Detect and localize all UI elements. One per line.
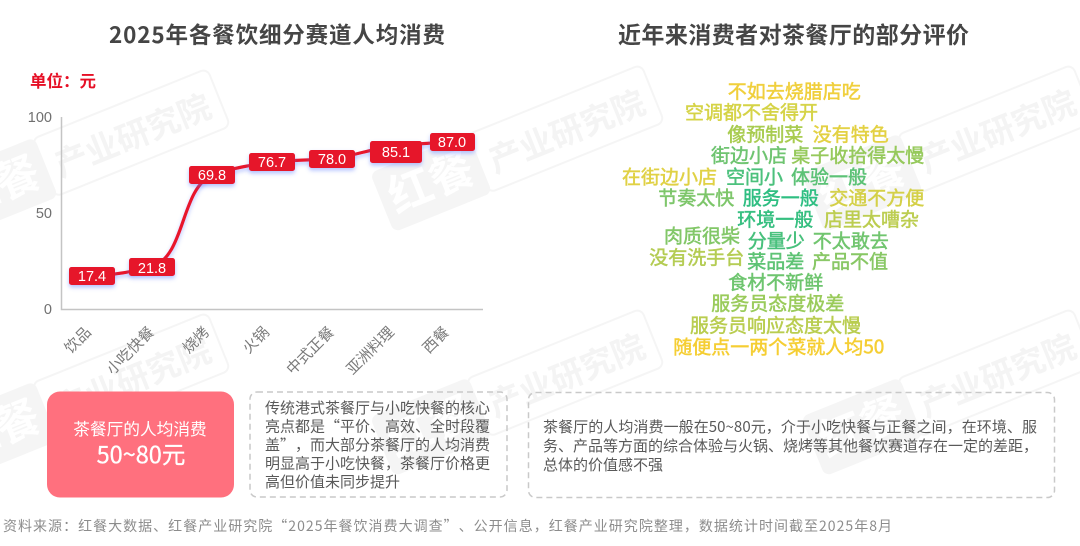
label 亚洲料理 85.1: 85.1 [382, 145, 410, 161]
source footnote: 资料来源：红餐大数据、红餐产业研究院“2025年餐饮消费大调查”、公开信息，红餐产业研究院整理，数据统计时间截至2025年8月 [3, 516, 892, 536]
phrase: 体验一般 [791, 162, 867, 190]
category labels: 西餐 [420, 324, 453, 357]
y axis ticks: 100 [28, 110, 52, 126]
text panel: overall value assessment: 务、产品等方面的综合体验与火锅、烧烤等其他餐饮赛道存在一定的差距， [543, 435, 1038, 456]
label 饮品 17.4: 17.4 [78, 269, 106, 285]
phrase: 服务员响应态度太慢 [690, 311, 861, 338]
phrase: 在街边小店 [622, 162, 717, 190]
phrase: 服务员态度极差 [711, 289, 844, 316]
phrase: 菜品差 [747, 247, 804, 274]
phrase: 不如去烧腊店吃 [728, 77, 861, 104]
phrase: 没有特色 [813, 120, 889, 147]
phrase: 空调都不舍得开 [685, 98, 818, 125]
phrase: 食材不新鲜 [728, 268, 823, 295]
data line [92, 142, 452, 276]
text panel: overall value assessment: 总体的价值感不强 [543, 454, 663, 475]
label 烧烤 69.8: 69.8 [198, 168, 226, 184]
title: right word cloud heading: 近年来消费者对茶餐厅的部分评价 [618, 16, 969, 50]
callout: tea restaurant average spend: 50~80元 [97, 436, 185, 470]
phrase: 空间小 [726, 162, 783, 190]
label 小吃快餐 21.8 [129, 258, 175, 277]
label 西餐 87.0: 87.0 [438, 135, 466, 151]
phrase: 产品不值 [812, 247, 888, 274]
background watermarks [0, 60, 1080, 480]
label 中式正餐 78.0: 78.0 [318, 152, 346, 168]
text panel: price vs value: 亮点都是“平价、高效、全时段覆 [265, 416, 490, 436]
phrase: 交通不方便 [829, 184, 924, 210]
label 中式正餐 78.0 [309, 150, 355, 168]
text panel: overall value assessment: 茶餐厅的人均消费一般在50~80元，介于小吃快餐与正餐之间，在环境、服 [543, 416, 1037, 437]
unit label: 单位：元 [30, 68, 96, 92]
text panel: overall value assessment [528, 392, 1054, 498]
phrase: 环境一般 [737, 205, 813, 232]
phrase: 分量少 [748, 226, 805, 254]
phrase: 肉质很柴 [664, 222, 740, 248]
text panel: price vs value: 传统港式茶餐厅与小吃快餐的核心 [265, 397, 490, 418]
category labels: 中式正餐 [283, 324, 338, 378]
label 亚洲料理 85.1 [370, 141, 422, 163]
category labels [62, 324, 453, 378]
label 小吃快餐 21.8: 21.8 [138, 261, 166, 277]
phrase: 不太敢去 [813, 226, 889, 254]
category labels: 火锅 [240, 324, 273, 357]
y axis ticks [28, 110, 52, 318]
text panel: price vs value: 盖”，而大部分茶餐厅的人均消费 [265, 434, 490, 455]
category labels: 饮品 [62, 324, 95, 357]
category labels: 亚洲料理 [343, 324, 398, 378]
label 西餐 87.0 [430, 133, 475, 151]
callout: tea restaurant average spend: 茶餐厅的人均消费 [73, 416, 207, 440]
y axis ticks: 0 [44, 302, 52, 318]
word cloud: consumer comments [622, 77, 924, 359]
phrase: 街边小店 [711, 141, 787, 168]
label 烧烤 69.8 [189, 166, 235, 184]
title: left chart heading: 2025年各餐饮细分赛道人均消费 [109, 18, 445, 50]
axes [62, 117, 483, 310]
phrase: 没有洗手台 [649, 243, 744, 270]
data labels [69, 133, 475, 285]
category labels: 小吃快餐 [103, 324, 158, 378]
callout: tea restaurant average spend [47, 392, 234, 498]
line chart: per-capita spend by segment [28, 110, 483, 378]
label 火锅 76.7: 76.7 [258, 155, 286, 171]
label 饮品 17.4 [69, 267, 115, 285]
text panel: price vs value: 高但价值未同步提升 [265, 471, 400, 492]
label 火锅 76.7 [249, 153, 295, 171]
text panel: price vs value [250, 392, 507, 497]
phrase: 随便点一两个菜就人均50 [673, 332, 884, 360]
phrase: 节奏太快 [658, 184, 734, 210]
phrase: 像预制菜 [727, 120, 803, 147]
phrase: 服务一般 [743, 184, 819, 210]
text panel: price vs value: 明显高于小吃快餐，茶餐厅价格更 [265, 452, 490, 474]
y axis ticks: 50 [36, 206, 52, 222]
phrase: 店里太嘈杂 [824, 205, 919, 232]
phrase: 桌子收拾得太慢 [791, 141, 924, 168]
category labels: 烧烤 [180, 324, 213, 357]
